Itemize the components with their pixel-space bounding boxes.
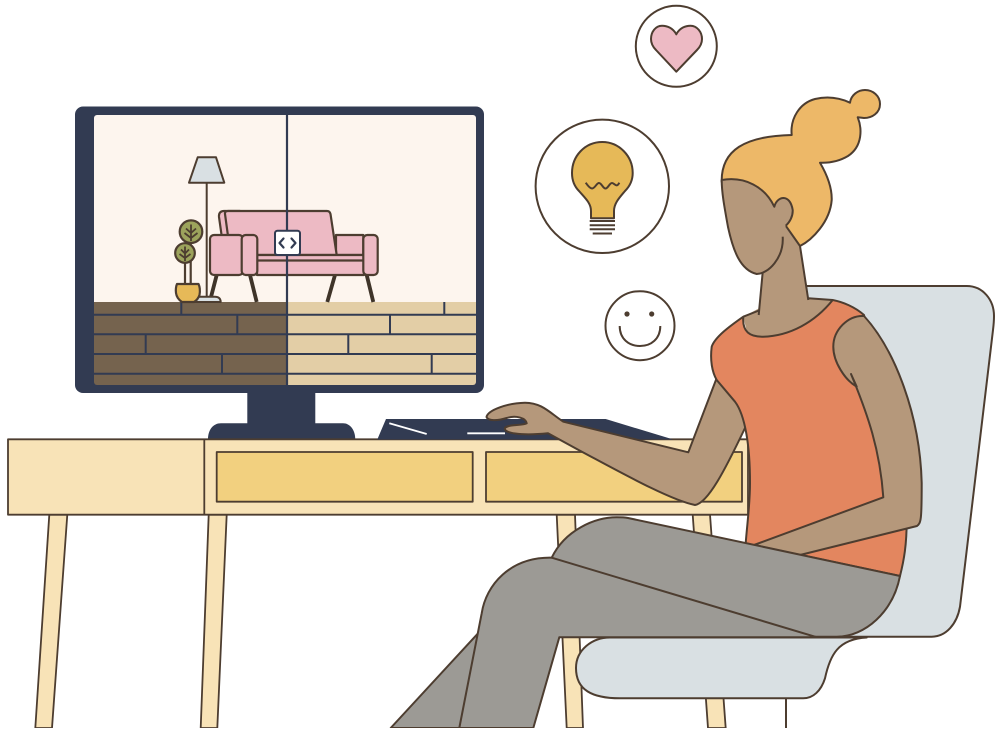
floor lamp [189, 157, 224, 302]
shoulder outlines [743, 298, 833, 317]
sofa legs [211, 275, 373, 302]
desk [8, 439, 748, 515]
far arm on mouse [486, 378, 752, 505]
right drawer [486, 452, 742, 502]
icon: smiley bubble [606, 291, 674, 360]
icon: heart bubble [636, 6, 717, 87]
chair [786, 286, 994, 728]
icon: light bulb bubble [536, 120, 669, 253]
chair back [804, 286, 994, 637]
head fill [722, 179, 793, 274]
slider divider line [286, 115, 288, 385]
monitor [75, 106, 484, 440]
screen: left half room with dark floor [94, 115, 287, 302]
shirt [711, 300, 907, 576]
floor plank lines [94, 302, 476, 374]
screen: right half room [287, 115, 476, 302]
desk legs [35, 515, 726, 728]
desk body [8, 439, 748, 515]
chair support post [785, 698, 787, 728]
keyboard [377, 419, 673, 440]
light wood floor [287, 302, 476, 385]
slider handle [275, 231, 300, 255]
left drawer [217, 452, 473, 502]
woman [391, 90, 922, 728]
sofa [210, 211, 378, 275]
monitor stand [208, 390, 355, 440]
neck front and back lines [759, 226, 808, 315]
chair seat cushion [576, 638, 867, 698]
front leg [459, 558, 817, 728]
near arm [754, 316, 922, 555]
potted plant [175, 220, 202, 302]
white strip below illustration [0, 728, 1000, 735]
monitor frame [75, 106, 484, 393]
hair [722, 90, 880, 246]
neck and shoulders skin [743, 222, 833, 345]
dark wood floor [94, 302, 287, 385]
face outline and ear [722, 179, 793, 274]
lower leg behind [391, 620, 500, 728]
rear thigh [552, 517, 900, 637]
